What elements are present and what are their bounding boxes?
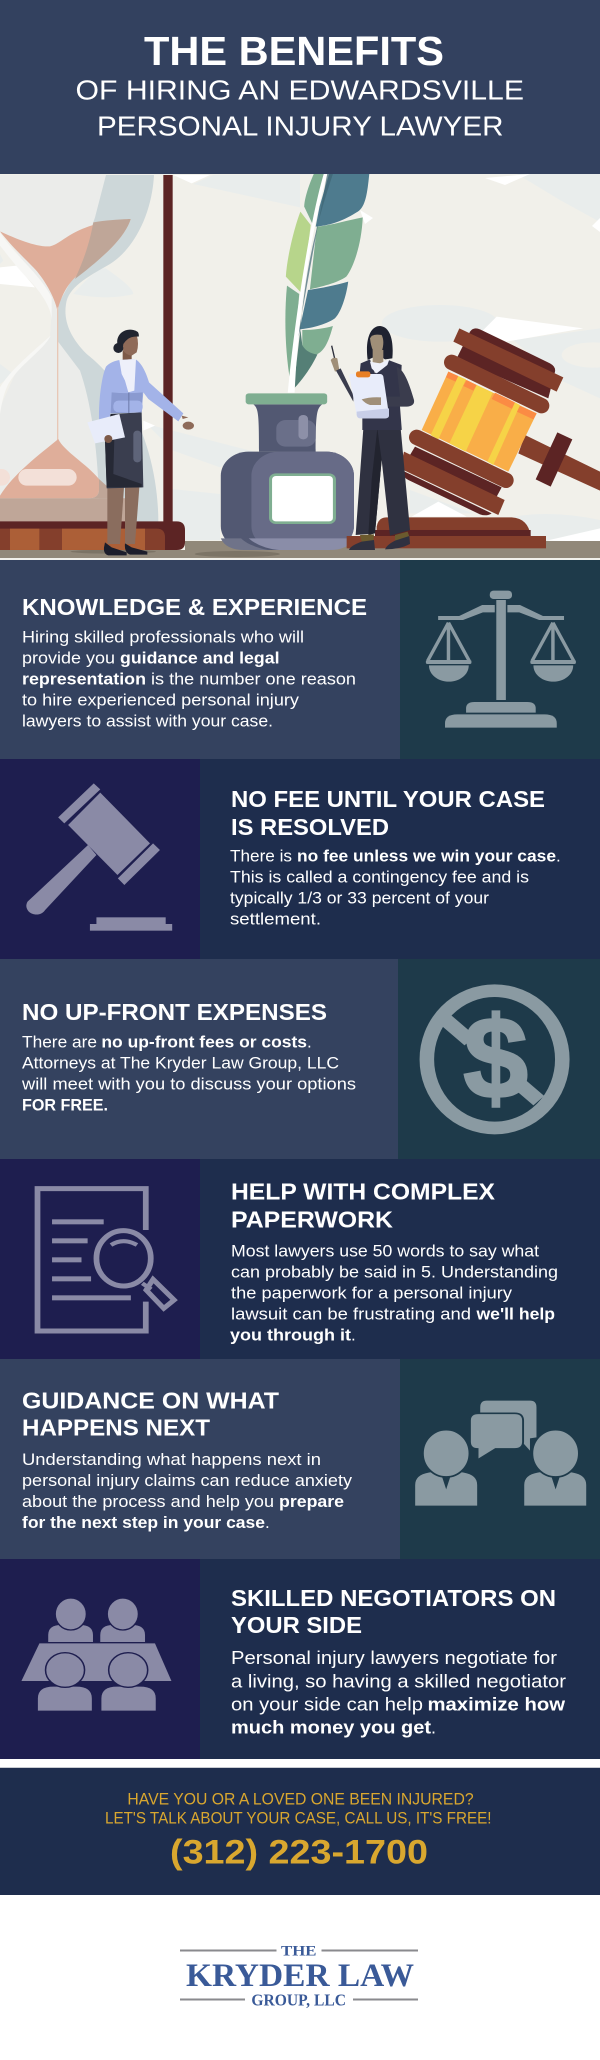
title: PERSONAL INJURY LAWYER — [97, 111, 504, 142]
body text: . — [351, 1326, 356, 1345]
callout text: LET'S TALK ABOUT YOUR CASE, CALL US, IT'S FREE! — [105, 1808, 492, 1827]
body text: Understanding what happens next in — [22, 1450, 321, 1469]
icon: gavel — [26, 783, 172, 931]
body text: There is — [230, 847, 292, 866]
logo: The Kryder Law Group — [180, 1943, 418, 2009]
body text: provide you — [22, 648, 115, 667]
body text: no up-front fees or costs — [101, 1033, 307, 1052]
heading — [231, 1585, 556, 1638]
heading: NO UP-FRONT EXPENSES — [22, 999, 327, 1025]
body text: will meet with you to discuss your options — [21, 1075, 356, 1094]
body text — [21, 1033, 356, 1115]
ink bottle — [221, 393, 354, 550]
body text: prepare — [279, 1492, 344, 1511]
heading: PAPERWORK — [231, 1207, 393, 1233]
body text: FOR FREE. — [22, 1096, 108, 1115]
heading: IS RESOLVED — [231, 814, 389, 840]
body text: Personal injury lawyers negotiate for — [231, 1648, 557, 1668]
body text: is the number one reason — [151, 669, 356, 688]
body text: Hiring skilled professionals who will — [22, 627, 304, 646]
icon: crossed-out dollar: $ — [463, 993, 528, 1123]
body text: . — [307, 1033, 312, 1052]
heading: HELP WITH COMPLEX — [231, 1179, 495, 1205]
panel: skilled negotiators — [0, 1559, 600, 1759]
body text: typically 1/3 or 33 percent of your — [230, 889, 489, 908]
heading: NO FEE UNTIL YOUR CASE — [231, 786, 545, 812]
body text — [22, 1450, 353, 1532]
quill feather — [285, 174, 369, 393]
icon: crossed-out dollar — [427, 991, 562, 1128]
body text: personal injury claims can reduce anxiety — [22, 1471, 353, 1490]
title: THE BENEFITS — [144, 28, 444, 74]
heading — [22, 1387, 280, 1440]
panel: knowledge and experience — [0, 560, 600, 759]
heading: HAPPENS NEXT — [22, 1414, 211, 1440]
panel: header — [0, 0, 600, 174]
body text — [230, 847, 561, 929]
body text: . — [431, 1717, 436, 1737]
body text: guidance and legal — [120, 648, 280, 667]
heading — [231, 786, 545, 840]
body text: to hire experienced personal injury — [22, 690, 300, 709]
body text: the paperwork for a personal injury — [231, 1284, 513, 1303]
icon: document with magnifier — [37, 1189, 174, 1331]
heading — [231, 1179, 495, 1233]
ground — [0, 541, 600, 558]
body text: Attorneys at The Kryder Law Group, LLC — [22, 1054, 339, 1073]
body text — [231, 1648, 566, 1737]
body text: lawsuit can be frustrating and — [231, 1305, 471, 1324]
body text: we'll help — [475, 1305, 555, 1324]
body text: no fee unless we win your case — [297, 847, 556, 866]
heading: YOUR SIDE — [231, 1612, 362, 1638]
title — [76, 28, 524, 142]
body text: representation — [22, 669, 146, 688]
body text: settlement. — [230, 910, 321, 929]
phone number: (312) 223-1700 — [170, 1834, 428, 1872]
panel: call to action — [0, 1767, 600, 1895]
panel: complex paperwork — [0, 1159, 600, 1359]
body text: for the next step in your case — [22, 1513, 265, 1532]
background shapes right — [382, 305, 600, 542]
callout text — [105, 1789, 492, 1827]
background shapes left — [0, 175, 300, 540]
logo: The Kryder Law Group: GROUP, LLC — [251, 1990, 346, 2009]
body text: There are — [22, 1033, 97, 1052]
hourglass — [0, 175, 185, 550]
icon: scales of justice — [426, 591, 576, 728]
title: OF HIRING AN EDWARDSVILLE — [76, 74, 524, 105]
ink bottle and quill — [221, 174, 369, 550]
icon: people around a table — [21, 1598, 171, 1711]
heading: GUIDANCE ON WHAT — [22, 1387, 280, 1413]
body text: This is called a contingency fee and is — [230, 868, 529, 887]
body text: about the process and help you — [22, 1492, 274, 1511]
body text: . — [265, 1513, 270, 1532]
panel: no fee until resolved — [0, 759, 600, 959]
body text: Most lawyers use 50 words to say what — [231, 1242, 539, 1261]
heading: SKILLED NEGOTIATORS ON — [231, 1585, 556, 1611]
body text: maximize how — [428, 1694, 566, 1714]
woman with clipboard — [331, 326, 414, 550]
logo: The Kryder Law Group: THE — [281, 1943, 316, 1959]
logo: The Kryder Law Group: KRYDER LAW — [186, 1958, 414, 1994]
body text — [230, 1242, 558, 1345]
body text: can probably be said in 5. Understanding — [231, 1263, 558, 1282]
icon: two people talking — [415, 1401, 586, 1506]
panel: no up-front expenses — [0, 959, 600, 1159]
heading: KNOWLEDGE & EXPERIENCE — [22, 594, 367, 620]
illustration: hourglass, quill and gavel — [0, 174, 600, 560]
body text — [22, 627, 356, 730]
panel: guidance on what happens next — [0, 1359, 600, 1559]
body text: lawyers to assist with your case. — [22, 711, 273, 730]
large gavel — [347, 328, 600, 548]
callout text: HAVE YOU OR A LOVED ONE BEEN INJURED? — [127, 1789, 474, 1808]
body text: a living, so having a skilled negotiator — [231, 1671, 566, 1691]
gavel and woman with clipboard — [331, 326, 600, 550]
body text: . — [556, 847, 561, 866]
body text: you through it — [230, 1326, 351, 1345]
body text: much money you get — [231, 1717, 431, 1737]
woman with paper — [87, 330, 194, 555]
body text: on your side can help — [231, 1694, 423, 1714]
